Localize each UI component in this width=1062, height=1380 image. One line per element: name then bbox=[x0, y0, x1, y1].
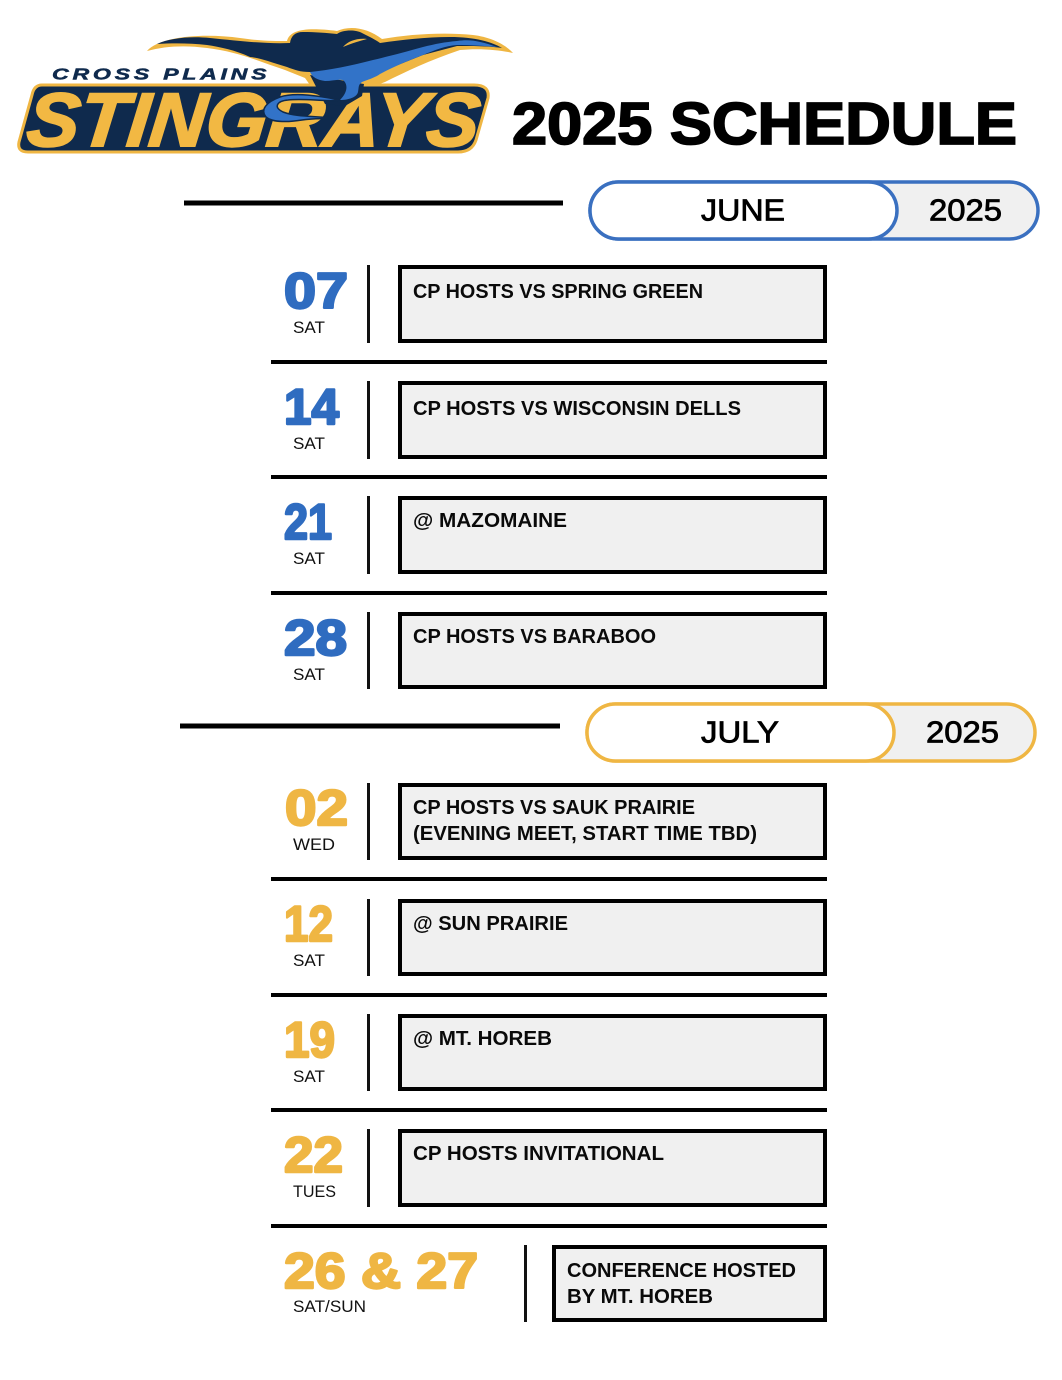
row: July 12: 12 bbox=[284, 896, 333, 952]
row: July 26 and 27: SAT/SUN bbox=[293, 1297, 366, 1316]
row: June 21: SAT bbox=[293, 549, 325, 568]
June pill: JUNE bbox=[701, 192, 785, 228]
row: July 22: TUES bbox=[293, 1182, 336, 1201]
July pill bbox=[587, 704, 1035, 761]
row: July 02: (EVENING MEET, START TIME TBD) bbox=[413, 823, 757, 845]
row: June 28: SAT bbox=[293, 665, 325, 684]
row: July 02: WED bbox=[293, 835, 335, 854]
row: July 26 and 27 bbox=[284, 1243, 825, 1322]
row: July 12: SAT bbox=[293, 951, 325, 970]
row: July 26 and 27: CONFERENCE HOSTED bbox=[567, 1260, 796, 1282]
row: June 21 bbox=[284, 494, 825, 574]
row: July 19 bbox=[284, 1012, 825, 1091]
row: June 07: 07 bbox=[284, 263, 348, 319]
stingray outline over banner bbox=[310, 75, 364, 106]
row: June 28: 28 bbox=[284, 610, 347, 666]
row: June 07: SAT bbox=[293, 318, 325, 337]
row: June 14 bbox=[284, 379, 825, 459]
row: July 19: 19 bbox=[284, 1012, 335, 1068]
row: July 02 bbox=[285, 780, 825, 860]
row: June 14: 14 bbox=[284, 379, 339, 435]
row: July 19: @ MT. HOREB bbox=[413, 1028, 552, 1050]
row: June 07 bbox=[284, 263, 825, 343]
row: July 19: SAT bbox=[293, 1067, 325, 1086]
stingray body bbox=[157, 30, 502, 75]
row: July 22: 22 bbox=[284, 1127, 343, 1183]
row: July 22: CP HOSTS INVITATIONAL bbox=[413, 1143, 664, 1165]
July pill: 2025 bbox=[926, 714, 999, 750]
June pill bbox=[590, 182, 1038, 239]
stingray outline bbox=[147, 28, 513, 105]
stingray eye bbox=[343, 39, 367, 47]
banner background bbox=[19, 85, 488, 152]
row: June 28: CP HOSTS VS BARABOO bbox=[413, 626, 656, 648]
logo: Cross Plains Stingrays bbox=[19, 28, 513, 163]
July pill: JULY bbox=[701, 714, 779, 750]
row: July 12 bbox=[284, 896, 825, 976]
row: June 21: @ MAZOMAINE bbox=[413, 510, 567, 532]
row: July 22 bbox=[284, 1127, 825, 1207]
row: July 26 and 27: 26 & 27 bbox=[284, 1243, 478, 1299]
wordmark: Stingrays: STINGRAYS bbox=[23, 78, 484, 163]
row: July 02: CP HOSTS VS SAUK PRAIRIE bbox=[413, 797, 695, 819]
row: June 14: SAT bbox=[293, 434, 325, 453]
row: June 14: CP HOSTS VS WISCONSIN DELLS bbox=[413, 398, 741, 420]
June pill: 2025 bbox=[929, 192, 1002, 228]
wordmark: Cross Plains: CROSS PLAINS bbox=[52, 66, 267, 84]
row: July 12: @ SUN PRAIRIE bbox=[413, 913, 568, 935]
row: June 07: CP HOSTS VS SPRING GREEN bbox=[413, 281, 703, 303]
section: June header bbox=[184, 182, 1038, 239]
row: July 02: 02 bbox=[285, 780, 348, 836]
stingray tail bbox=[264, 95, 340, 122]
title: 2025 SCHEDULE bbox=[512, 91, 1017, 157]
row: June 21: 21 bbox=[284, 494, 332, 550]
row: June 28 bbox=[284, 610, 825, 689]
row: July 26 and 27: BY MT. HOREB bbox=[567, 1286, 713, 1308]
stingray belly bbox=[310, 40, 497, 100]
section: July header bbox=[180, 704, 1035, 761]
